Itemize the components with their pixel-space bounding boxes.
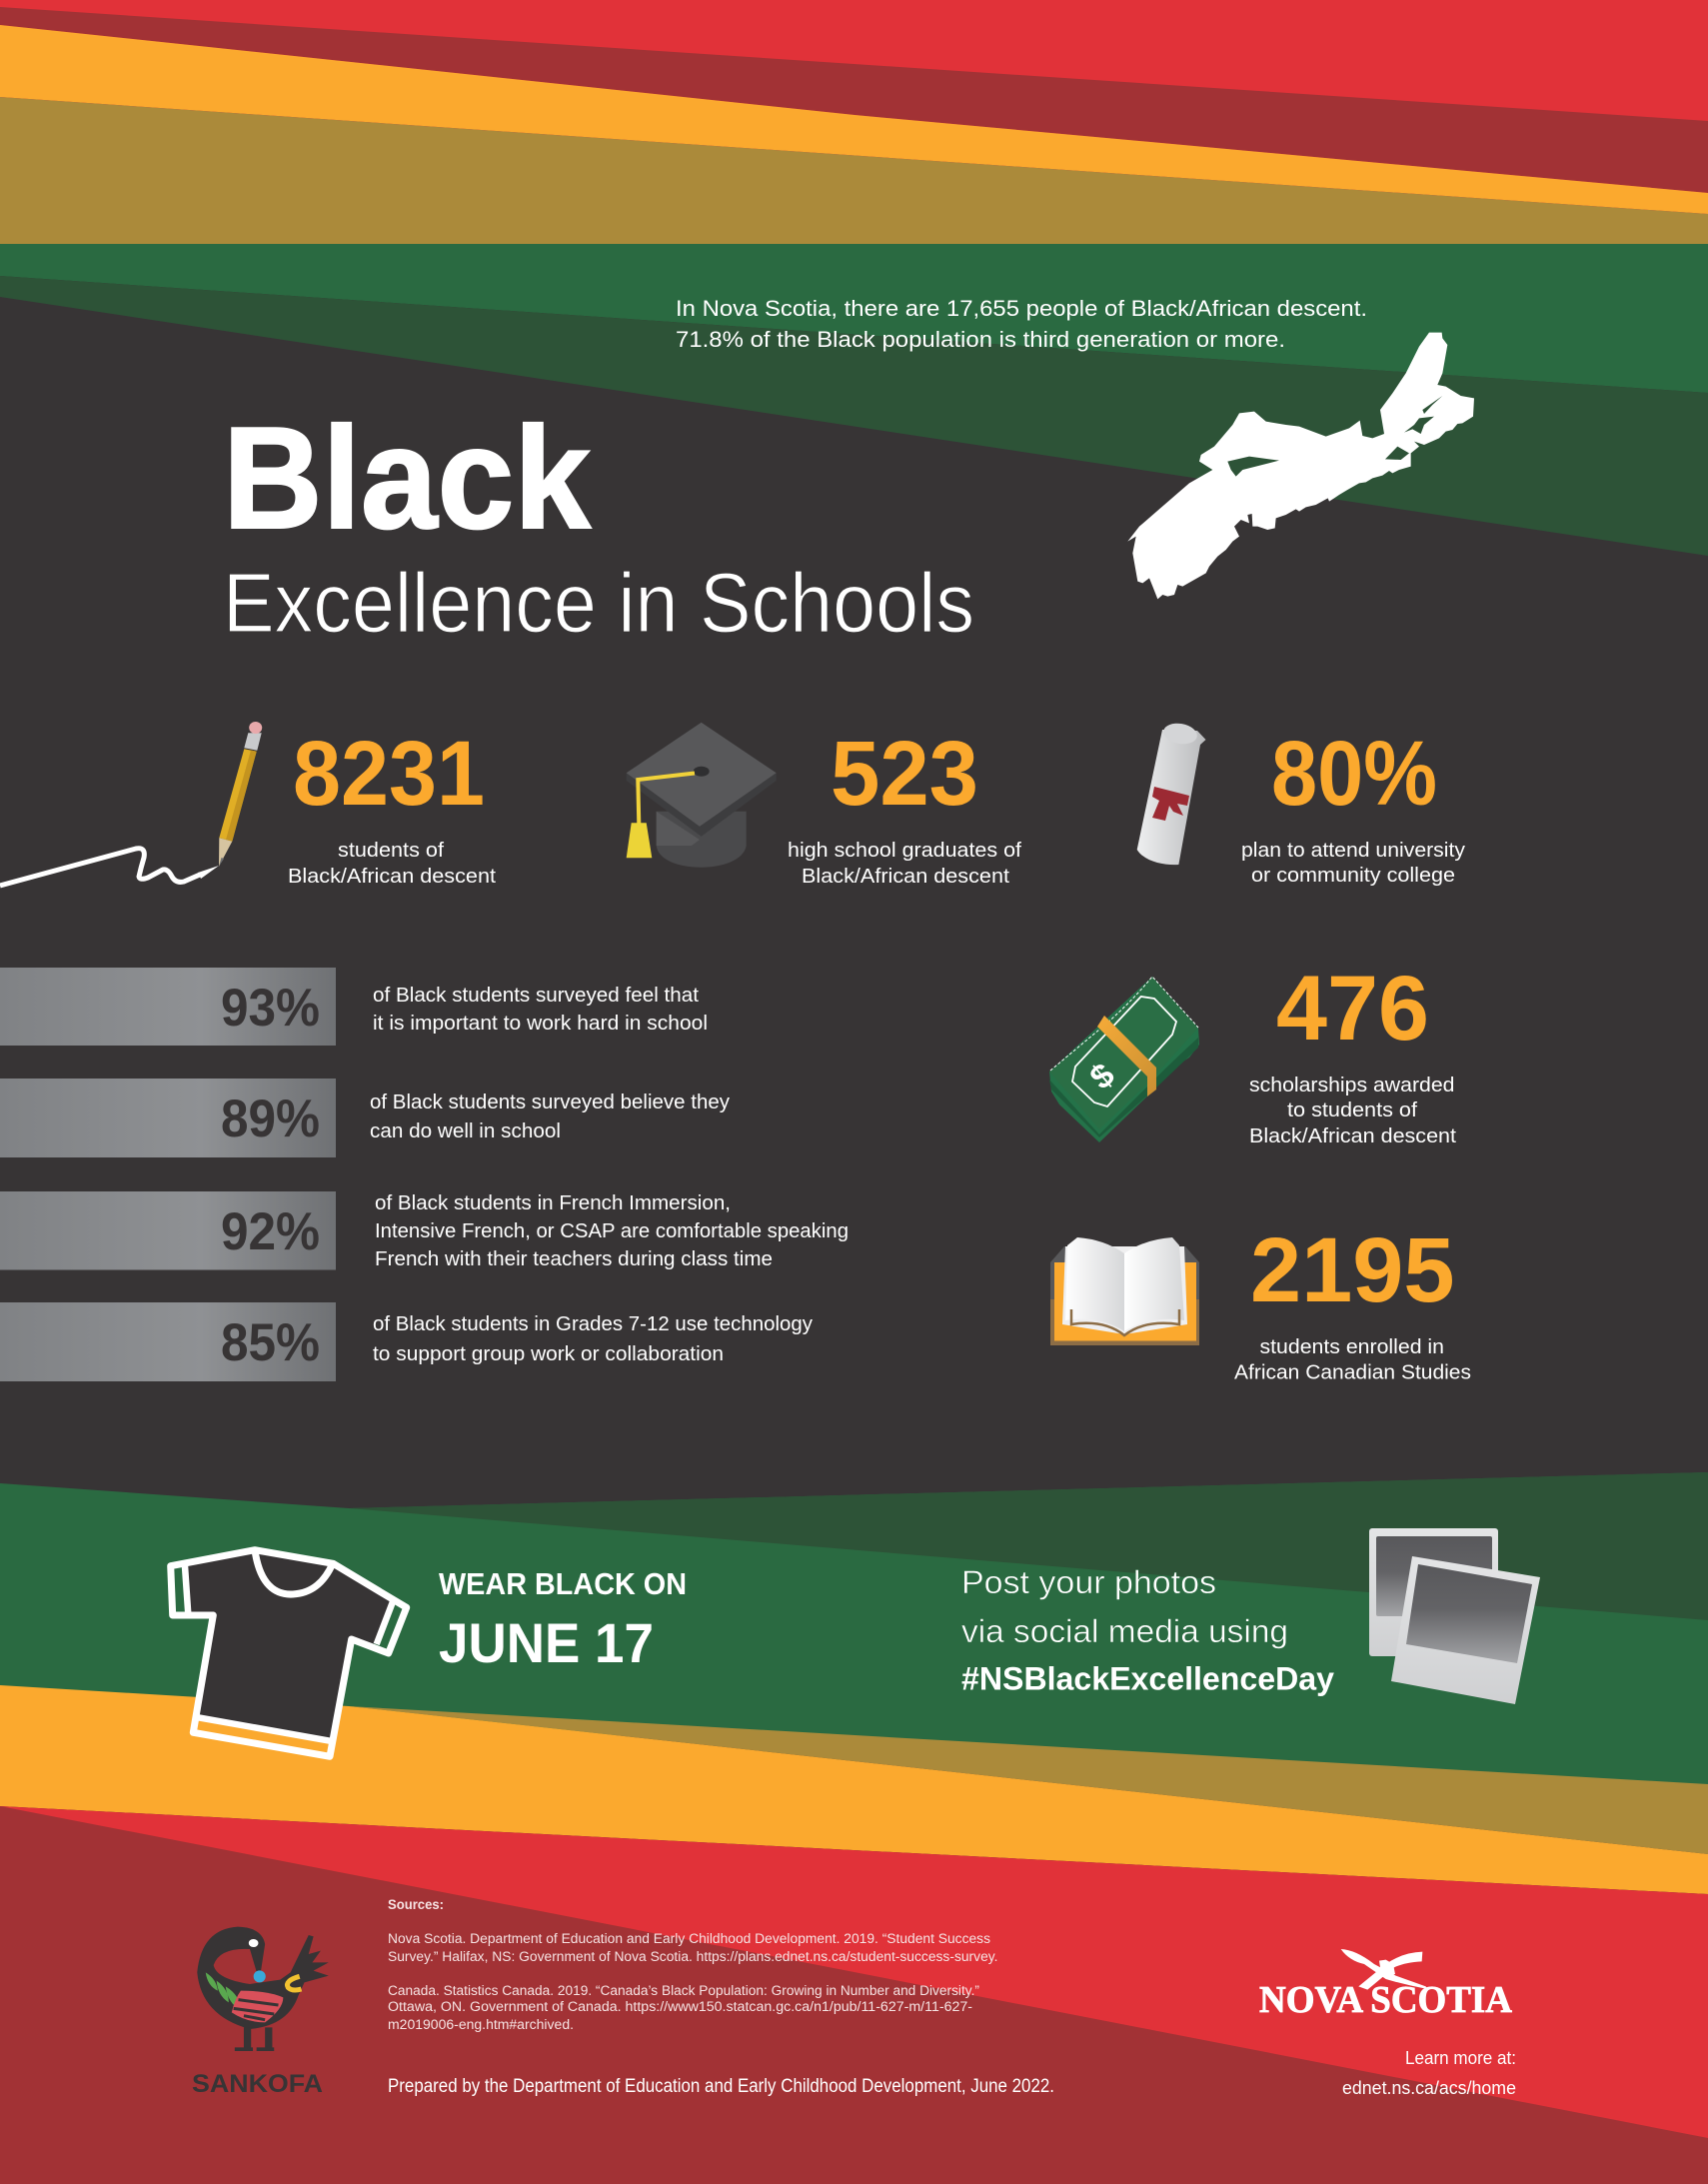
stat: 523 graduates: high school graduates of (788, 839, 1021, 862)
stat: 80% plan to attend: or community college (1251, 864, 1455, 887)
icon: diploma scroll (1137, 721, 1205, 865)
bar: 92%: of Black students in French Immersion, (375, 1191, 731, 1214)
logo: Nova Scotia (1259, 1949, 1513, 2021)
prepared by line: Prepared by the Department of Education and Early Childhood Development, June 2022. (388, 2076, 1054, 2097)
stat: 476 scholarships: Black/African descent (1249, 1124, 1456, 1147)
bar: 92%: French with their teachers during class time (375, 1247, 773, 1270)
icon: open book (1050, 1237, 1199, 1345)
bar: 92% (0, 1191, 849, 1270)
social media callout: #NSBlackExcellenceDay (961, 1661, 1334, 1697)
social media callout (961, 1564, 1334, 1697)
stat: 8231 students: 8231 (293, 723, 485, 825)
title: Black (223, 397, 591, 559)
top colour bands (0, 0, 1708, 556)
icon: Nova Scotia map (1127, 333, 1474, 599)
icon: t-shirt (171, 1550, 407, 1756)
wear black callout (439, 1566, 687, 1674)
social media callout: Post your photos (961, 1564, 1216, 1600)
social media callout: via social media using (961, 1613, 1288, 1649)
bar: 93%: of Black students surveyed feel that (373, 984, 699, 1007)
sources: Ottawa, ON. Government of Canada. https://www150.statcan.gc.ca/n1/pub/11-627-m/11-627- (388, 1999, 972, 2014)
intro text (676, 296, 1367, 352)
wear black callout: JUNE 17 (439, 1611, 654, 1674)
icon: stack of money (1049, 977, 1199, 1142)
bar: 93% (0, 968, 708, 1046)
bar: 89%: can do well in school (370, 1119, 561, 1142)
icon: pencil with scribble (0, 722, 262, 886)
sources: Survey.” Halifax, NS: Government of Nova Scotia. https://plans.ednet.ns.ca/student-success-survey. (388, 1949, 997, 1964)
bar: 93%: 93% (221, 979, 320, 1038)
stat: 523 graduates (788, 723, 1021, 888)
stat: 8231 students: students of (338, 839, 444, 862)
intro text: In Nova Scotia, there are 17,655 people of Black/African descent. (676, 296, 1367, 321)
bar: 89%: 89% (221, 1090, 320, 1148)
bar: 85% (0, 1302, 814, 1381)
stat: 80% plan to attend: plan to attend university (1241, 839, 1466, 862)
bar: 92%: 92% (221, 1202, 320, 1261)
stat: 80% plan to attend (1241, 723, 1466, 887)
icon: graduation cap (627, 723, 777, 868)
stat: 476 scholarships: scholarships awarded (1249, 1074, 1455, 1096)
logo: Nova Scotia: NOVA SCOTIA (1259, 1979, 1513, 2021)
learn more: Learn more at: (1405, 2048, 1516, 2068)
bar: 93%: it is important to work hard in school (373, 1012, 708, 1035)
bar: 89%: of Black students surveyed believe they (370, 1091, 731, 1113)
Sankofa label: SANKOFA (192, 2070, 323, 2098)
sources: m2019006-eng.htm#archived. (388, 2017, 574, 2032)
stat: 8231 students: Black/African descent (288, 865, 496, 888)
wear black callout: WEAR BLACK ON (439, 1566, 687, 1601)
stat: 2195 students: 2195 (1250, 1219, 1455, 1321)
title (223, 397, 974, 650)
bar: 85%: to support group work or collaboration (373, 1342, 724, 1365)
bottom colour bands (0, 1472, 1708, 2184)
learn more (1342, 2048, 1516, 2098)
stat: 2195 students (1234, 1219, 1471, 1383)
learn more: ednet.ns.ca/acs/home (1342, 2078, 1516, 2098)
icon: photos (1369, 1528, 1540, 1704)
icon: Sankofa bird (197, 1927, 329, 2051)
stat: 476 scholarships: to students of (1287, 1098, 1417, 1121)
title: Excellence in Schools (223, 556, 974, 650)
stat: 2195 students: African Canadian Studies (1234, 1361, 1471, 1383)
stat: 476 scholarships (1249, 958, 1456, 1147)
intro text: 71.8% of the Black population is third generation or more. (676, 327, 1285, 352)
stat: 2195 students: students enrolled in (1259, 1335, 1444, 1358)
stat: 476 scholarships: 476 (1276, 958, 1429, 1060)
sources: Nova Scotia. Department of Education and Early Childhood Development. 2019. “Student Success (388, 1931, 990, 1946)
icon: stack of money: $ (1083, 1056, 1122, 1097)
stat: 8231 students (288, 723, 496, 888)
sources (388, 1897, 997, 2032)
bar: 89% (0, 1079, 731, 1157)
bar: 85%: 85% (221, 1313, 320, 1372)
sources: Sources: (388, 1897, 444, 1912)
stat: 80% plan to attend: 80% (1271, 723, 1437, 825)
sources: Canada. Statistics Canada. 2019. “Canada’s Black Population: Growing in Number and Diversity.” (388, 1983, 979, 1998)
bar: 92%: Intensive French, or CSAP are comfortable speaking (375, 1219, 849, 1242)
bar: 85%: of Black students in Grades 7-12 use technology (373, 1312, 814, 1335)
stat: 523 graduates: Black/African descent (802, 865, 1009, 888)
stat: 523 graduates: 523 (831, 723, 978, 825)
